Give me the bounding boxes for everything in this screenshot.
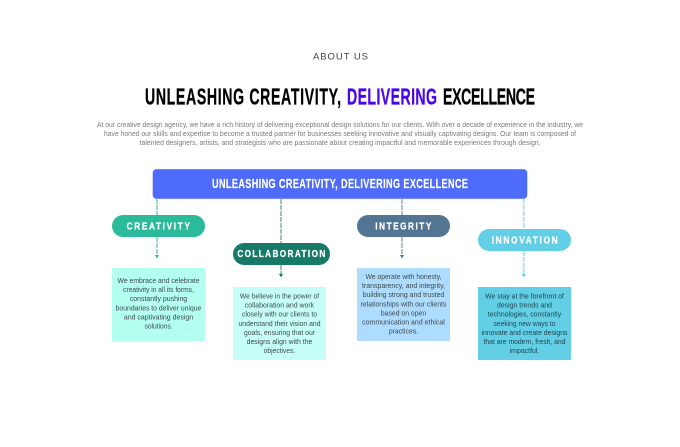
- title: DELIVERING: [347, 84, 437, 111]
- card: innovation: seeking new ways to: [494, 319, 556, 328]
- card: innovation: [478, 287, 571, 360]
- card: creativity: solutions.: [144, 322, 172, 330]
- card: integrity: relationships with our clients: [361, 299, 447, 308]
- card: integrity: building strong and trusted: [363, 290, 444, 299]
- card: innovation: impactful.: [510, 346, 539, 355]
- eyebrow: about us: ABOUT US: [313, 52, 368, 62]
- card: creativity: boundaries to deliver unique: [116, 303, 201, 312]
- pill: integrity: INTEGRITY: [375, 221, 431, 231]
- intro paragraph: At our creative design agency, we have a rich history of delivering exceptional design solutions for our clients. With over a decade of experience in the industry, we: [97, 120, 583, 129]
- panel: innovation: [478, 229, 571, 360]
- card: collaboration: understand their vision and: [238, 319, 320, 328]
- title: EXCELLENCE: [443, 84, 535, 111]
- card: integrity: based on open: [381, 308, 426, 317]
- panel: collaboration: [233, 243, 330, 360]
- panel: integrity: [357, 215, 450, 341]
- card: collaboration: designs align with the: [247, 337, 312, 346]
- intro paragraph: have honed our skills and expertise to become a trusted partner for businesses seeking innovative and visually captivating designs. Our team is composed of: [104, 129, 577, 138]
- title: UNLEASHING CREATIVITY,: [145, 84, 341, 111]
- card: integrity: communication and ethical: [362, 318, 445, 326]
- card: innovation: design trends and: [497, 301, 552, 310]
- card: collaboration: goals, ensuring that our: [244, 328, 315, 337]
- card: collaboration: collaboration and work: [245, 301, 314, 310]
- card: creativity: [112, 268, 205, 341]
- card: creativity: constantly pushing: [130, 294, 187, 303]
- card: creativity: We embrace and celebrate: [118, 276, 200, 285]
- panel: creativity: [112, 215, 205, 341]
- intro paragraph: [97, 120, 583, 147]
- pill: innovation: INNOVATION: [492, 235, 558, 245]
- card: collaboration: objectives.: [264, 346, 295, 355]
- connector: integrity: [400, 199, 404, 258]
- card: integrity: We operate with honesty,: [366, 272, 442, 281]
- intro paragraph: talented designers, artists, and strategists who are passionate about creating impactful and memorable experiences through design.: [140, 138, 540, 147]
- card: creativity: and captivating design: [124, 312, 193, 321]
- card: innovation: We stay at the forefront of: [485, 292, 565, 300]
- card: integrity: practices.: [389, 327, 418, 336]
- connector: creativity: [155, 199, 159, 258]
- card: integrity: [357, 268, 450, 341]
- pill: collaboration: COLLABORATION: [237, 248, 325, 259]
- card: collaboration: closely with our clients to: [242, 310, 317, 319]
- card: collaboration: We believe in the power of: [240, 292, 320, 300]
- card: integrity: transparency, and integrity,: [362, 281, 445, 290]
- connector: innovation: [522, 199, 526, 278]
- main banner: [152, 169, 528, 199]
- card: collaboration: [233, 287, 326, 360]
- connector: collaboration: [279, 199, 283, 278]
- card: creativity: creativity in all its forms,: [123, 285, 194, 294]
- card: innovation: technologies, constantly: [488, 310, 561, 319]
- card: innovation: that are modern, fresh, and: [484, 337, 566, 346]
- main banner: UNLEASHING CREATIVITY, DELIVERING EXCELLENCE: [212, 178, 468, 191]
- card: innovation: innovate and create designs: [482, 328, 568, 337]
- title: [145, 84, 535, 111]
- pill: creativity: CREATIVITY: [127, 221, 190, 231]
